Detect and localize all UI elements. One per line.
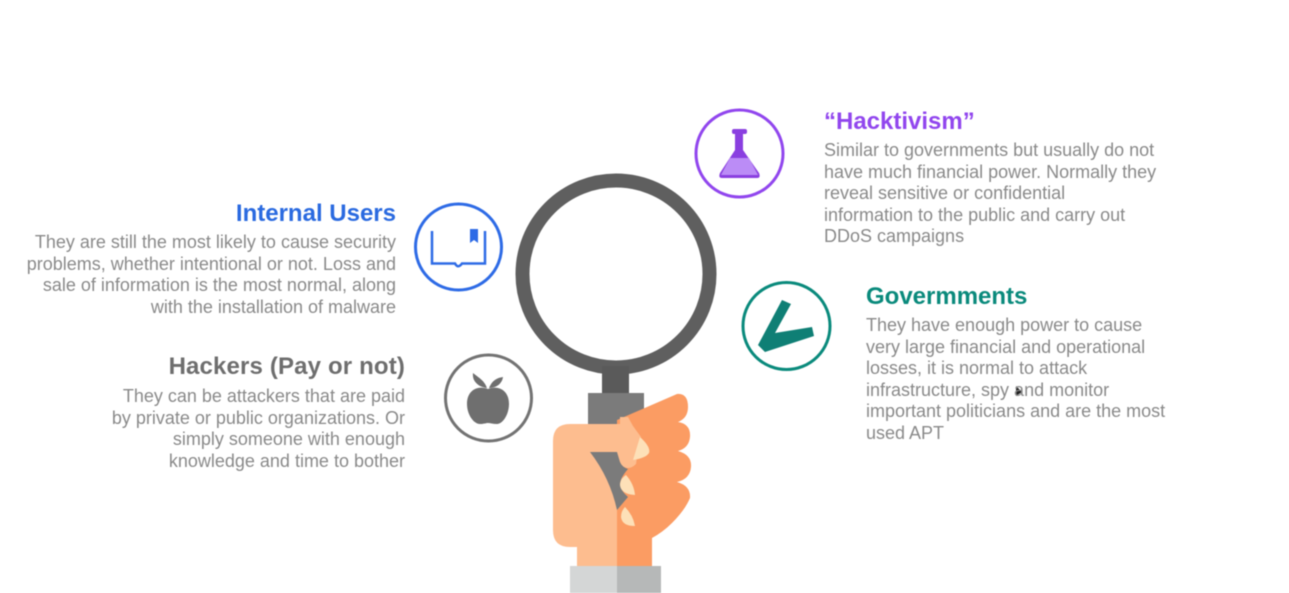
- text: Hacktivism description: information to the public and carry out: [824, 205, 1125, 225]
- text: Hackers description: They can be attackers that are paid: [123, 386, 405, 406]
- text: Internal Users description: [27, 232, 396, 317]
- text: Governments description: important politicians and are the most: [866, 401, 1165, 421]
- text: Hackers description: by private or public organizations. Or: [112, 408, 405, 428]
- text: Hacktivism description: Similar to governments but usually do not: [824, 140, 1154, 160]
- text: Governments description: infrastructure, spy and monitor: [866, 380, 1109, 400]
- text: Hacktivism description: [824, 140, 1156, 247]
- icon: shirt cuff: [570, 566, 661, 593]
- text: Hacktivism description: have much financial power. Normally they: [824, 162, 1156, 182]
- text: Hackers description: simply someone with enough: [173, 429, 405, 449]
- panel: Hacktivism: [824, 108, 1156, 247]
- icon: magnifying glass: [522, 180, 710, 425]
- text: Hackers description: knowledge and time to bother: [169, 451, 405, 471]
- text: Internal Users description: They are still the most likely to cause security: [35, 232, 396, 252]
- icon: mouse cursor: [1016, 386, 1022, 396]
- text: Hacktivism description: DDoS campaigns: [824, 226, 964, 246]
- text: Hackers description: [112, 386, 406, 472]
- icon: flask: [696, 110, 783, 197]
- text: Governments description: They have enough power to cause: [866, 315, 1142, 335]
- text: Governments description: losses, it is normal to attack: [866, 358, 1087, 378]
- icon: apple: [446, 355, 532, 441]
- text: Hacktivism description: reveal sensitive or confidential: [824, 183, 1065, 203]
- heading: Hackers (Pay or not): Hackers (Pay or not): [169, 353, 405, 380]
- panel: Hackers: [112, 353, 406, 472]
- text: Governments description: [866, 315, 1166, 443]
- heading: Hacktivism: “Hacktivism”: [824, 108, 975, 135]
- icon: book: [416, 204, 502, 290]
- panel: Governments: [866, 283, 1166, 443]
- text: Governments description: used APT: [866, 423, 944, 443]
- text: Governments description: very large financial and operational: [866, 337, 1145, 357]
- icon: teal check: [743, 282, 830, 370]
- icon: hand holding handle: [553, 394, 691, 566]
- heading: Govermments: Govermments: [866, 283, 1027, 310]
- text: Internal Users description: with the installation of malware: [151, 297, 396, 317]
- text: Internal Users description: problems, whether intentional or not. Loss and: [27, 254, 396, 274]
- panel: Internal Users: [27, 200, 396, 317]
- heading: Internal Users: Internal Users: [236, 200, 396, 227]
- text: Internal Users description: sale of information is the most normal, along: [43, 275, 396, 295]
